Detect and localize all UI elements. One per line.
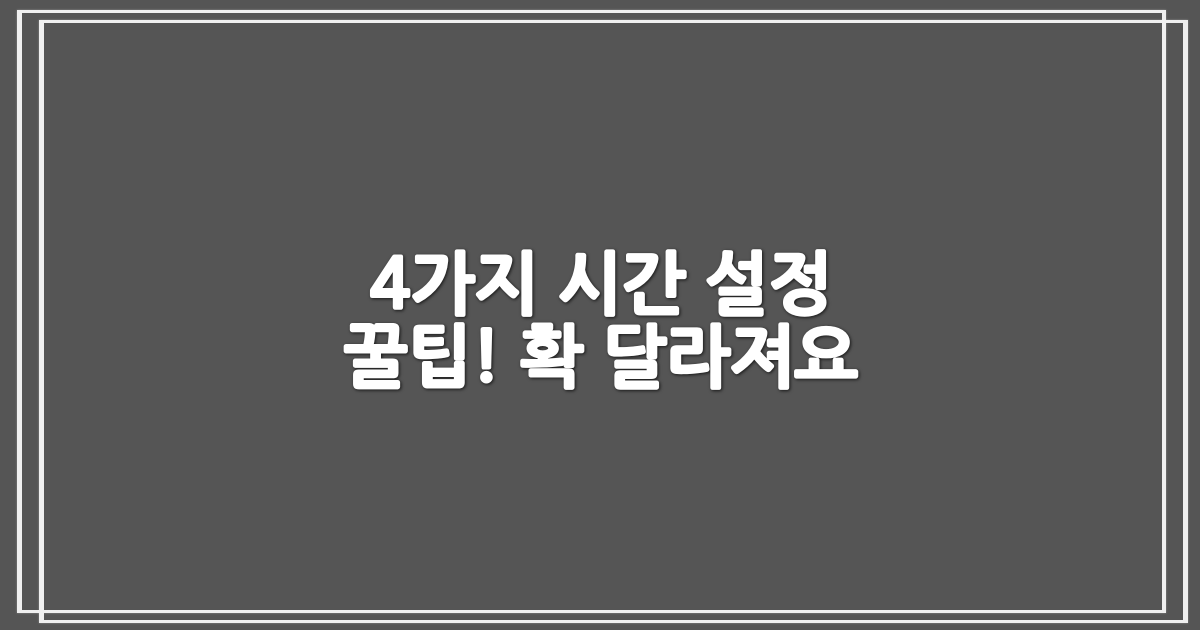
title line 1: 4가지 시간 설정: [370, 252, 832, 319]
title line 2: 꿀팁! 확 달라져요: [344, 325, 858, 392]
title: [343, 248, 861, 392]
